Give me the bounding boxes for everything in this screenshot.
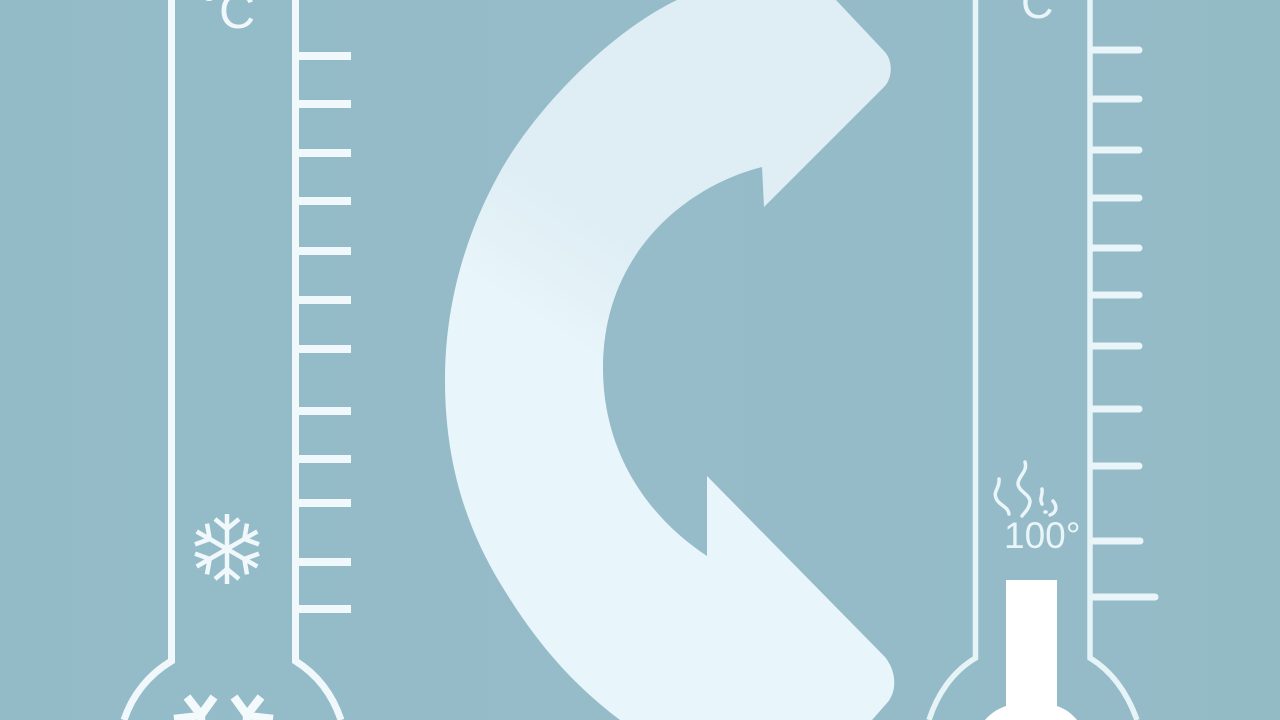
right thermometer (hot)	[929, 0, 1155, 720]
cycle arrow	[445, 0, 894, 720]
left thermometer (cold)	[124, 0, 351, 720]
thermometer outline: cold	[124, 0, 341, 720]
scale ticks: hot	[1093, 50, 1155, 597]
icon: snowflake	[191, 514, 263, 584]
scale ticks: cold	[298, 56, 351, 609]
icon: steam	[995, 462, 1056, 516]
icon: large snowflake in bulb	[174, 697, 273, 720]
boiling point label: 100°	[1004, 515, 1081, 556]
mercury column and bulb	[985, 580, 1077, 720]
thermometer outline: hot	[929, 0, 1137, 720]
